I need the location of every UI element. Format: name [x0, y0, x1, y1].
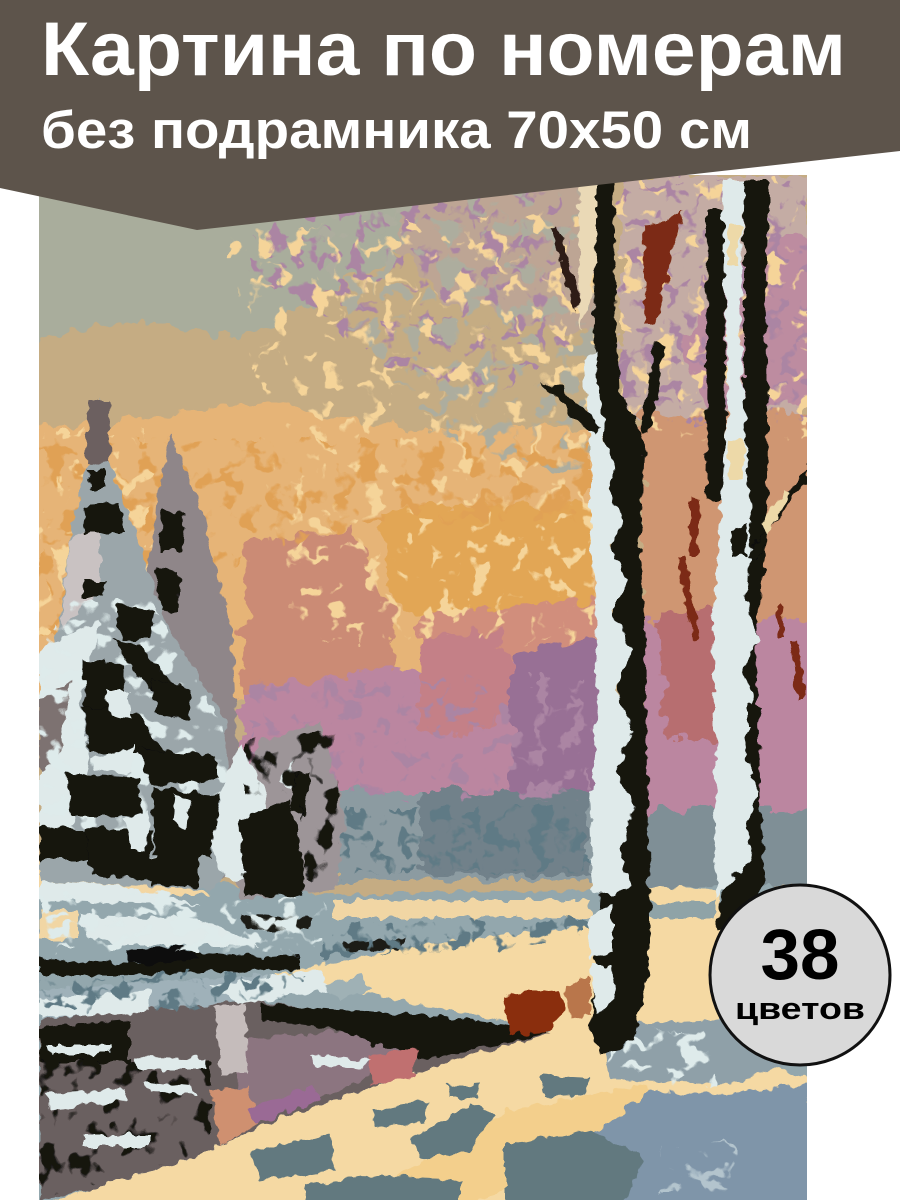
ground mottling [40, 895, 740, 1195]
subtitle: без подрамника 70х50 см [41, 101, 752, 160]
header banner [0, 0, 900, 230]
birch trunks [540, 175, 807, 1055]
sky and autumn foliage [20, 160, 820, 890]
near spruce [39, 397, 235, 890]
shadows on path [250, 1075, 590, 1200]
title: Картина по номерам [41, 7, 846, 92]
small spruce [225, 720, 345, 900]
badge: 38 colours [710, 885, 890, 1065]
foliage mottling [40, 180, 810, 870]
spruce trees [39, 397, 345, 900]
badge: 38 colours: 38 [761, 916, 839, 995]
birch 1 [590, 180, 650, 1055]
badge: 38 colours: цветов [735, 991, 865, 1026]
painting: winter forest [20, 160, 820, 1200]
ground [20, 855, 820, 1200]
dark branches [39, 470, 310, 897]
water and far bank [39, 915, 590, 1200]
snow on branches [92, 690, 295, 850]
birch 2 [706, 210, 726, 500]
far spruce [140, 432, 240, 880]
branches [550, 225, 582, 312]
